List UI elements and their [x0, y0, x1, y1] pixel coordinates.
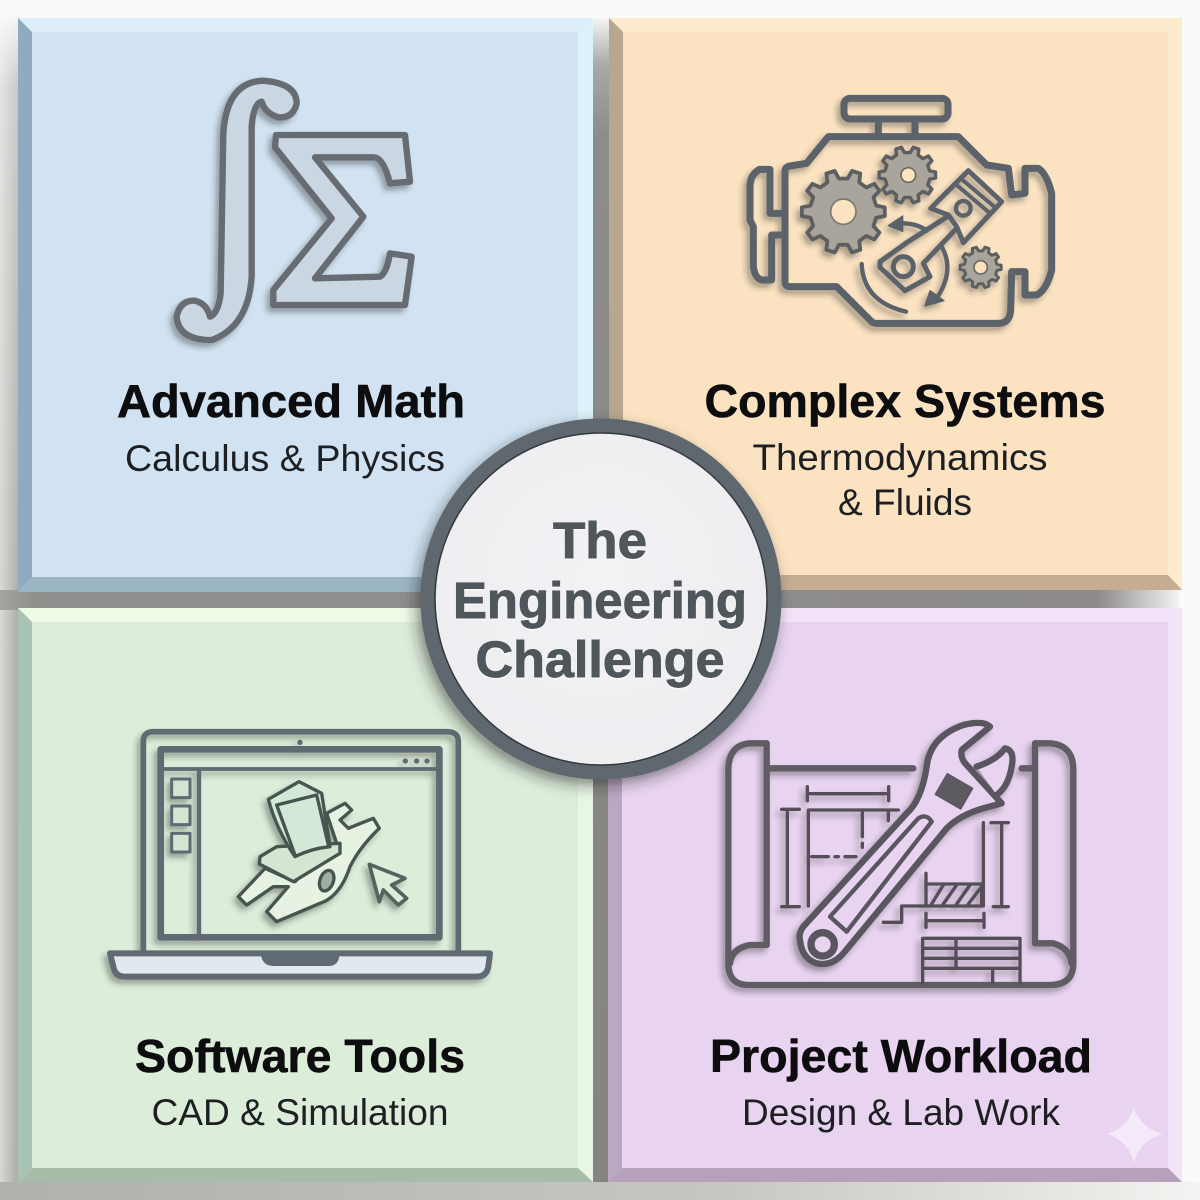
adjustable wrench — [800, 723, 1012, 964]
heading: Software Tools: Software Tools — [135, 1030, 465, 1082]
text: Calculus and Physics: Calculus & Physics — [125, 438, 445, 479]
badge title — [453, 512, 747, 688]
central badge — [428, 426, 774, 772]
vertical gap between tiles — [590, 18, 612, 1182]
laptop base — [110, 953, 490, 977]
mouse cursor — [369, 864, 407, 905]
badge title: Challenge — [476, 631, 724, 688]
panel: Software Tools tile — [18, 608, 593, 1182]
icon: laptop with CAD part — [110, 732, 490, 977]
medium gear — [879, 147, 936, 203]
icon: blueprint with wrench — [728, 723, 1073, 985]
text: Thermodynamics and Fluids: & Fluids — [838, 482, 972, 523]
large gear — [802, 171, 885, 252]
icon: engine with gears and piston — [750, 98, 1052, 323]
engine cap — [844, 98, 948, 134]
panel: Advanced Math tile — [18, 18, 593, 592]
text: CAD and Simulation: CAD & Simulation — [152, 1092, 448, 1133]
piston and rod — [880, 171, 1002, 291]
badge ring — [428, 426, 774, 772]
text: Thermodynamics and Fluids — [752, 437, 1048, 523]
rotation arrows — [862, 216, 947, 312]
CAD part — [238, 782, 379, 922]
integral sign — [177, 81, 297, 340]
engine body outline — [785, 137, 1052, 323]
sigma sign — [273, 135, 412, 305]
camera — [297, 740, 303, 745]
heading: Project Workload: Project Workload — [710, 1030, 1092, 1082]
icon: integral and sigma — [177, 81, 412, 340]
panel: Project Workload tile — [608, 608, 1182, 1182]
title block table — [923, 938, 1020, 983]
application window — [161, 749, 439, 937]
engine left bracket — [750, 169, 785, 280]
heading: Advanced Math: Advanced Math — [117, 375, 465, 427]
left margin shadow — [0, 18, 18, 1200]
badge title: Engineering — [453, 572, 747, 629]
toolbar buttons — [172, 779, 190, 852]
badge inner edge — [435, 433, 767, 765]
small gear — [960, 247, 1001, 288]
text: Design and Lab Work: Design & Lab Work — [742, 1092, 1060, 1133]
icon: sparkle watermark — [1107, 1107, 1163, 1163]
horizontal gap between tiles — [0, 590, 1180, 610]
bottom margin shadow — [0, 1182, 1200, 1200]
heading: Complex Systems: Complex Systems — [704, 375, 1106, 427]
technical drawing lines — [782, 787, 1008, 927]
badge title: The — [553, 512, 647, 569]
laptop lid — [143, 732, 458, 952]
blueprint scroll — [728, 743, 1073, 985]
panel: Complex Systems tile — [609, 18, 1182, 590]
text: Thermodynamics and Fluids: Thermodynamics — [752, 437, 1048, 478]
